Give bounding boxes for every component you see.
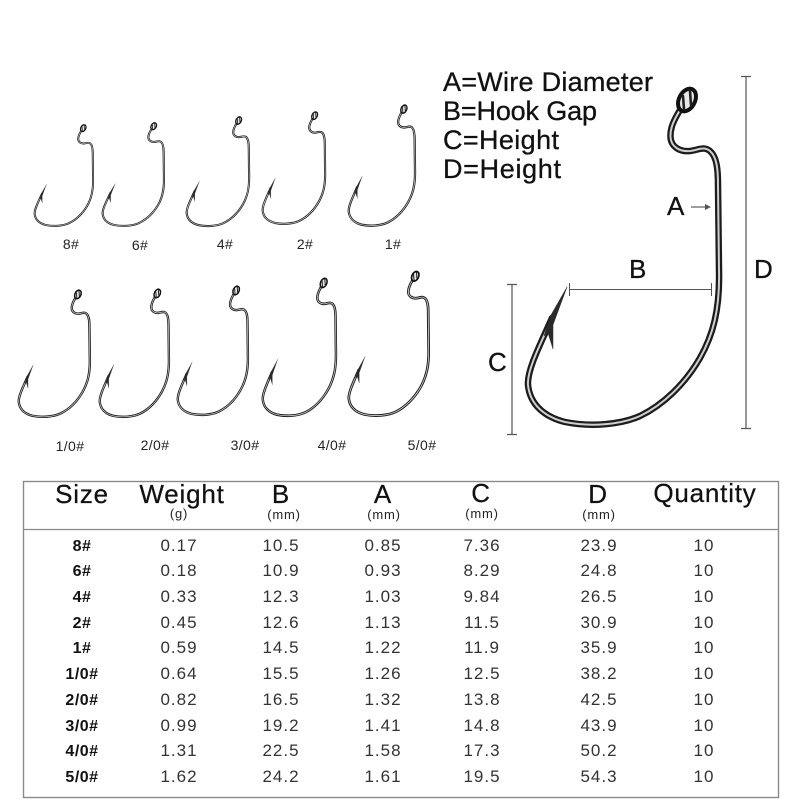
- hook 5/0#: 5/0#: [408, 437, 436, 453]
- hook 8#: 8#: [63, 236, 79, 252]
- table frame: [24, 482, 778, 798]
- table header: (mm): [465, 506, 499, 521]
- row 1#: 14.5: [262, 638, 300, 657]
- row 2/0#: 1.32: [364, 690, 402, 709]
- row 6#: [73, 561, 714, 580]
- row 4/0#: [65, 741, 714, 760]
- row 1/0#: 12.5: [463, 664, 501, 683]
- row 6#: 10.9: [262, 561, 300, 580]
- hook 1#: 1#: [385, 236, 401, 252]
- row 6#: 0.93: [364, 561, 402, 580]
- hook 4#: 4#: [217, 236, 233, 252]
- row 4/0#: 1.58: [364, 741, 402, 760]
- row 8#: 0.17: [160, 536, 198, 555]
- hook 1#: [349, 104, 415, 252]
- row 6#: 0.18: [160, 561, 198, 580]
- row 8#: 7.36: [463, 536, 501, 555]
- row 1#: 35.9: [580, 638, 618, 657]
- row 1/0#: 10: [694, 664, 714, 683]
- table header: Size: [55, 479, 109, 509]
- row 3/0#: 3/0#: [65, 718, 99, 735]
- row 4#: 4#: [73, 589, 91, 606]
- row 1/0#: 0.64: [160, 664, 198, 683]
- row 2/0#: [65, 690, 714, 709]
- table header: (mm): [367, 507, 401, 522]
- hook 6#: 6#: [132, 237, 148, 253]
- table header: C: [471, 478, 491, 508]
- row 8#: 10: [694, 536, 714, 555]
- row 1/0#: 38.2: [580, 664, 618, 683]
- legend: dimension definitions: A=Wire Diameter: [443, 67, 653, 97]
- hook 5/0#: [349, 270, 436, 453]
- diagram: large hook with dimension lines: [488, 76, 773, 434]
- row 6#: 6#: [73, 563, 91, 580]
- row 5/0#: 24.2: [262, 767, 300, 786]
- row 3/0#: 1.41: [364, 716, 402, 735]
- hook 1/0#: 1/0#: [56, 438, 84, 454]
- legend: dimension definitions: C=Height: [443, 125, 559, 155]
- table header: (mm): [267, 507, 301, 522]
- row 3/0#: 14.8: [463, 716, 501, 735]
- legend: dimension definitions: B=Hook Gap: [443, 96, 597, 126]
- row 4#: 26.5: [580, 587, 618, 606]
- dimension B: hook gap line: B: [629, 254, 646, 284]
- row 4/0#: 50.2: [580, 741, 618, 760]
- row 1#: 11.9: [464, 638, 500, 657]
- hook 2#: [263, 111, 325, 252]
- hook 1/0#: [19, 289, 90, 454]
- row 2#: 10: [694, 613, 714, 632]
- row 8#: 23.9: [580, 536, 618, 555]
- dimension A: wire diameter arrow: A: [667, 191, 685, 221]
- row 2/0#: 13.8: [463, 690, 501, 709]
- row 4/0#: 22.5: [262, 741, 300, 760]
- row 2/0#: 42.5: [580, 690, 618, 709]
- row 2#: 0.45: [160, 613, 198, 632]
- hook size samples: top row: [35, 104, 415, 253]
- row 6#: 24.8: [580, 561, 618, 580]
- row 1/0#: 15.5: [262, 664, 300, 683]
- table header: [55, 478, 757, 522]
- hook 2/0#: [100, 288, 169, 453]
- row 5/0#: 1.61: [364, 767, 402, 786]
- row 1#: 1.22: [364, 638, 402, 657]
- table header: B: [272, 479, 290, 509]
- row 2#: [73, 613, 714, 632]
- row 1/0#: 1/0#: [65, 666, 99, 683]
- row 4/0#: 1.31: [160, 741, 198, 760]
- hook 3/0#: [178, 285, 259, 453]
- row 4#: 9.84: [463, 587, 501, 606]
- row 2/0#: 10: [694, 690, 714, 709]
- row 2/0#: 0.82: [160, 690, 198, 709]
- row 2#: 30.9: [580, 613, 618, 632]
- hook 4/0#: 4/0#: [318, 437, 346, 453]
- icon: large hook: [528, 86, 719, 425]
- row 8#: 10.5: [262, 536, 300, 555]
- row 2/0#: 16.5: [262, 690, 300, 709]
- row 4/0#: 4/0#: [65, 743, 99, 760]
- row 2#: 11.5: [464, 613, 500, 632]
- table header: (mm): [582, 507, 616, 522]
- table header: Weight: [139, 479, 225, 509]
- row 4#: 10: [694, 587, 714, 606]
- hook 2/0#: 2/0#: [141, 437, 169, 453]
- hook 8#: [35, 124, 93, 252]
- row 2/0#: 2/0#: [65, 692, 99, 709]
- row 1#: 10: [694, 638, 714, 657]
- row 6#: 10: [694, 561, 714, 580]
- dimension C: point height line: [488, 284, 517, 434]
- row 3/0#: 0.99: [160, 716, 198, 735]
- row 5/0#: 10: [694, 767, 714, 786]
- dimension D: total height line: [741, 76, 773, 428]
- row 5/0#: [65, 767, 714, 786]
- row 1/0#: [65, 664, 714, 683]
- hook 2#: 2#: [297, 236, 313, 252]
- table header: D: [588, 479, 608, 509]
- row 5/0#: 1.62: [160, 767, 198, 786]
- row 1#: [73, 638, 714, 657]
- hook 4#: [187, 116, 249, 252]
- row 3/0#: 43.9: [580, 716, 618, 735]
- row 4#: 12.3: [262, 587, 300, 606]
- table header: Quantity: [653, 478, 757, 508]
- row 4/0#: 10: [694, 741, 714, 760]
- hook 6#: [103, 122, 164, 253]
- row 1#: 0.59: [160, 638, 198, 657]
- row 5/0#: 54.3: [580, 767, 618, 786]
- row 4#: 0.33: [160, 587, 198, 606]
- dimension B: hook gap line: [570, 254, 712, 296]
- legend: dimension definitions: [443, 67, 653, 184]
- dimension D: total height line: D: [754, 254, 773, 284]
- row 1#: 1#: [73, 640, 91, 657]
- row 4#: [73, 587, 714, 606]
- row 8#: [73, 536, 714, 555]
- row 3/0#: 10: [694, 716, 714, 735]
- row 2#: 2#: [73, 615, 91, 632]
- table header: A: [374, 479, 392, 509]
- table: hook specifications: [23, 478, 778, 798]
- row 6#: 8.29: [463, 561, 501, 580]
- dimension A: wire diameter arrow: [667, 191, 711, 221]
- hook 3/0#: 3/0#: [231, 437, 259, 453]
- hook size samples: bottom row: [19, 270, 436, 454]
- row 4/0#: 17.3: [463, 741, 501, 760]
- dimension C: point height line: C: [488, 347, 507, 377]
- row 1/0#: 1.26: [364, 664, 402, 683]
- row 5/0#: 5/0#: [65, 769, 99, 786]
- row 8#: 0.85: [364, 536, 402, 555]
- row 2#: 1.13: [364, 613, 402, 632]
- row 5/0#: 19.5: [463, 767, 501, 786]
- hook 4/0#: [263, 277, 346, 453]
- row 4#: 1.03: [364, 587, 402, 606]
- row 3/0#: [65, 716, 714, 735]
- row 8#: 8#: [73, 538, 91, 555]
- legend: dimension definitions: D=Height: [443, 154, 561, 184]
- row 3/0#: 19.2: [262, 716, 300, 735]
- table header: (g): [170, 506, 188, 521]
- row 2#: 12.6: [262, 613, 300, 632]
